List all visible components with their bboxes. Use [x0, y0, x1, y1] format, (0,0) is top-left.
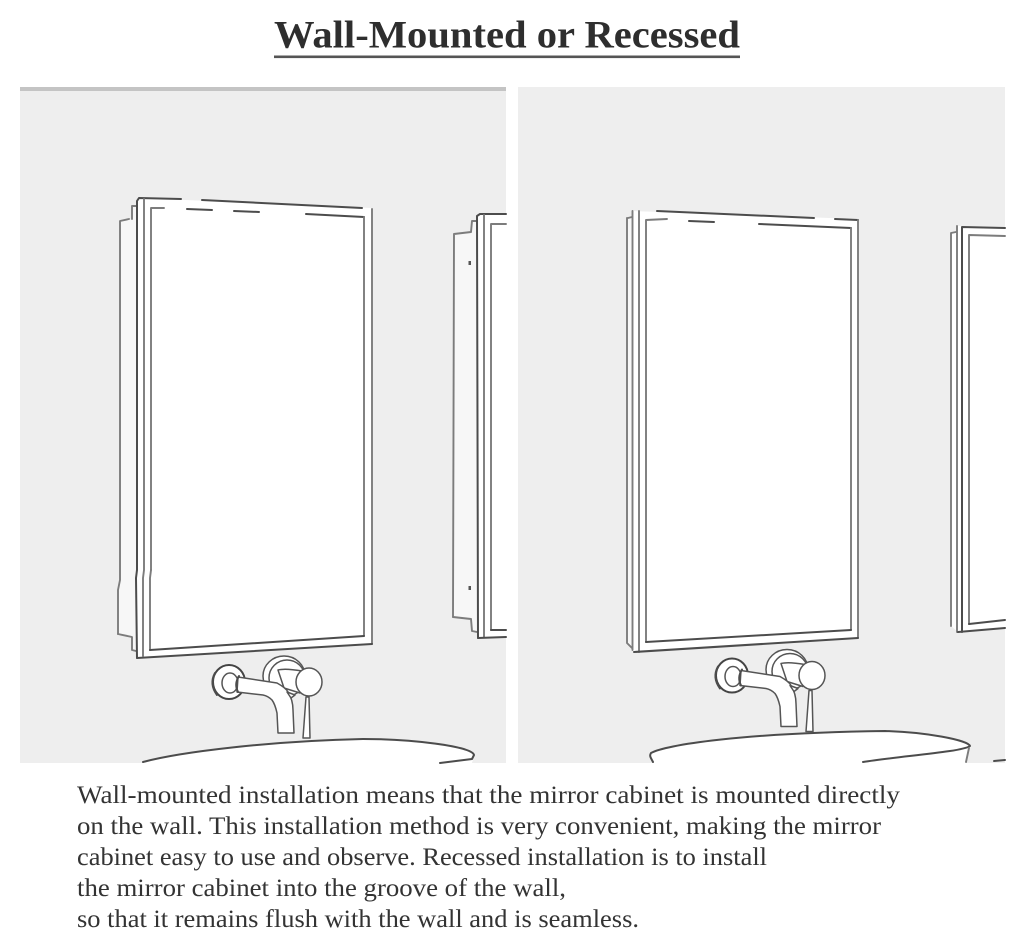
description text: so that it remains flush with the wall and is seamless. [77, 904, 639, 933]
description text: cabinet easy to use and observe. Recessed installation is to install [77, 842, 767, 871]
sink basin [650, 731, 1005, 763]
neighbouring wall-mounted cabinet [453, 214, 506, 638]
description text: Wall-mounted installation means that the mirror cabinet is mounted directly [77, 780, 900, 809]
neighbouring recessed cabinet [951, 226, 1005, 632]
sink basin [143, 739, 474, 763]
panel: recessed illustration [518, 87, 1005, 763]
description text [77, 780, 900, 933]
faucet [212, 656, 322, 738]
description text: on the wall. This installation method is very convenient, making the mirror [77, 811, 882, 840]
recessed mirror cabinet [627, 211, 858, 652]
wall-mounted mirror cabinet [118, 198, 372, 658]
title: Wall-Mounted or Recessed [274, 14, 740, 56]
panel: wall-mounted illustration [20, 87, 506, 763]
faucet [715, 650, 825, 732]
description text: the mirror cabinet into the groove of the wall, [77, 873, 566, 902]
